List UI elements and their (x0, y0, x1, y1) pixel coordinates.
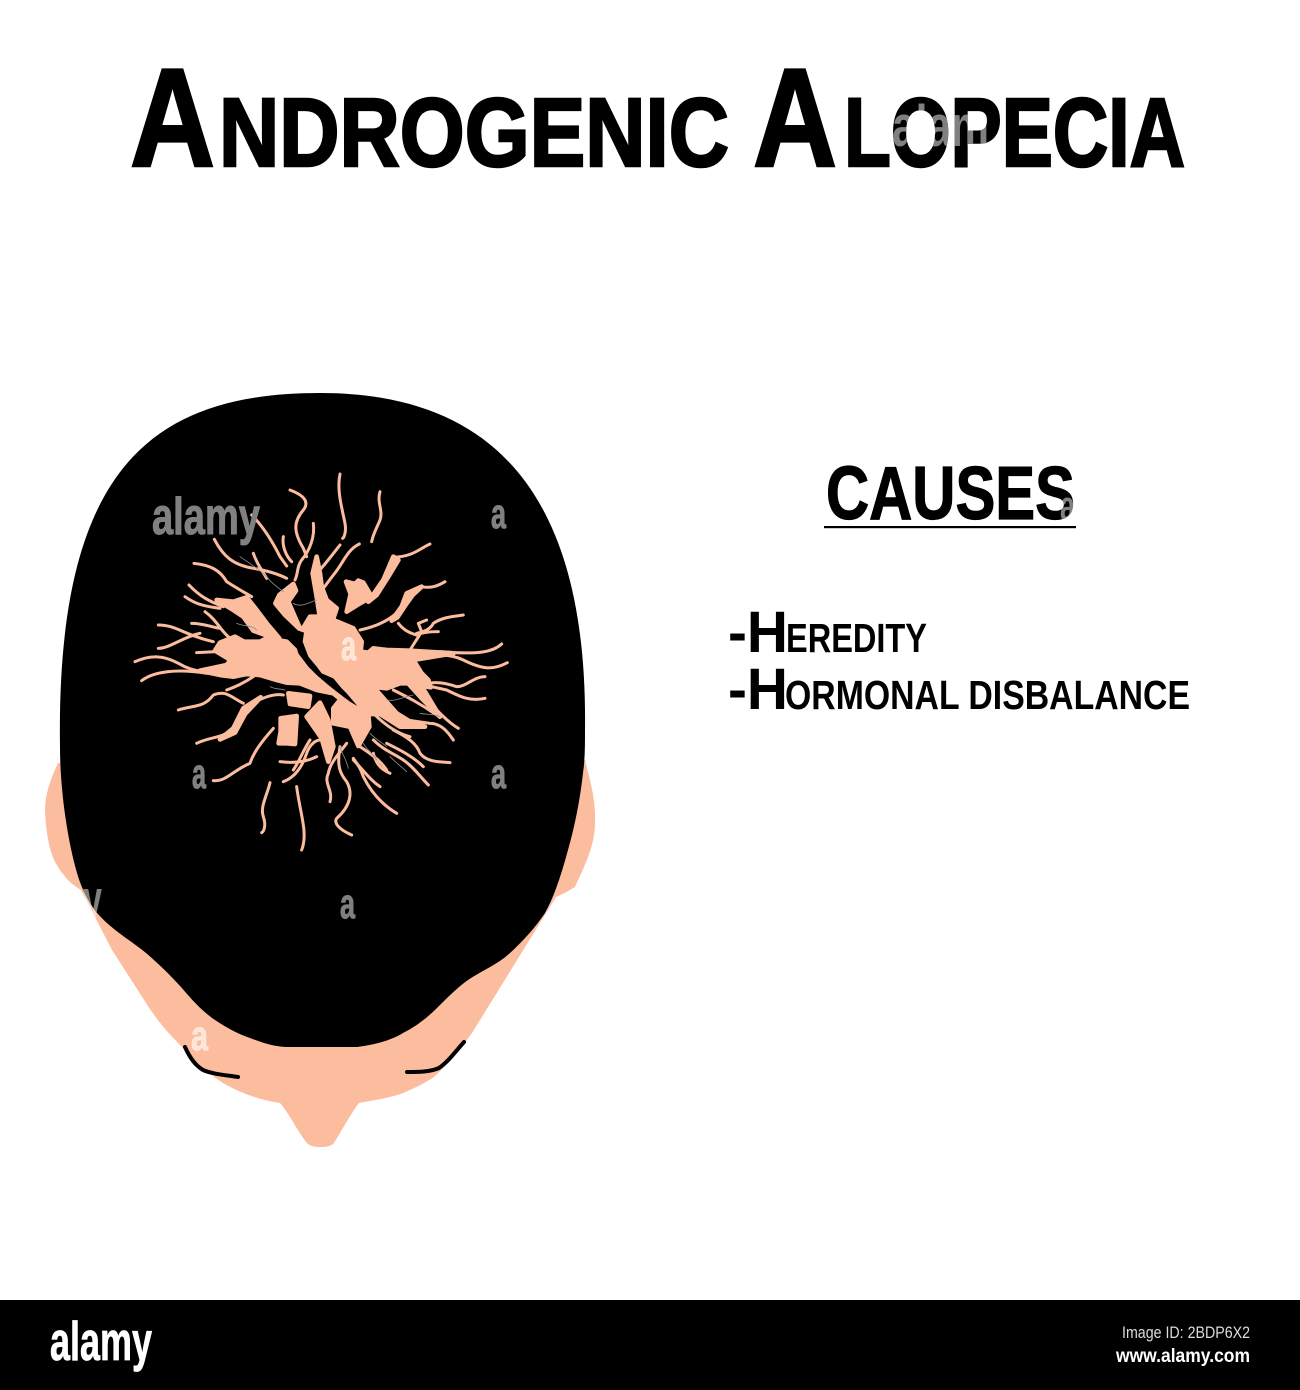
watermark overlays on black artwork: alam (892, 94, 989, 159)
skin: face and ears (45, 760, 595, 1147)
causes list (728, 600, 1190, 722)
title: NDROGENIC (219, 78, 729, 187)
bald patch (135, 474, 507, 850)
central thinning area (200, 557, 453, 762)
watermark on skin: a (341, 622, 356, 669)
watermark on hair: a (491, 490, 506, 537)
hair strands inside the patch (295, 631, 357, 706)
watermark on skin: a (191, 1012, 208, 1059)
watermark on hair: alamy (152, 488, 260, 546)
watermark overlays on black artwork: y (83, 868, 102, 933)
eyebrow right (407, 1042, 464, 1072)
item: heredity: -H (728, 600, 788, 665)
title: A (130, 39, 215, 196)
watermark letter on ear: y (83, 868, 102, 933)
hair (60, 393, 585, 1047)
footer bar: Image ID: 2BDP6X2 (1122, 1323, 1250, 1342)
title: LOPECIA (844, 78, 1185, 187)
watermark on skin (191, 622, 356, 1059)
item: heredity (728, 600, 927, 665)
footer bar: www.alamy.com (1115, 1346, 1250, 1367)
footer bar (0, 1300, 1300, 1390)
watermark on hair: a (340, 880, 355, 927)
head illustration (45, 393, 595, 1147)
item: hormonal disbalance (728, 657, 1190, 722)
thin tendrils (135, 474, 507, 850)
footer bar: alamy (50, 1310, 152, 1372)
item: heredity: EREDITY (786, 615, 927, 661)
grey fine strands (237, 557, 440, 772)
watermark overlays on black artwork (83, 94, 1075, 933)
causes heading: CAUSES (826, 451, 1075, 535)
watermark on hair: a (192, 750, 206, 797)
title (130, 39, 1185, 196)
eyebrow left (185, 1047, 238, 1077)
item: hormonal disbalance: -H (728, 657, 788, 722)
watermark on hair (152, 488, 506, 927)
watermark on hair: a (491, 750, 506, 797)
item: hormonal disbalance: ORMONAL DISBALANCE (785, 672, 1190, 718)
watermark overlays on black artwork: a (1060, 482, 1075, 529)
title: A (753, 39, 837, 196)
